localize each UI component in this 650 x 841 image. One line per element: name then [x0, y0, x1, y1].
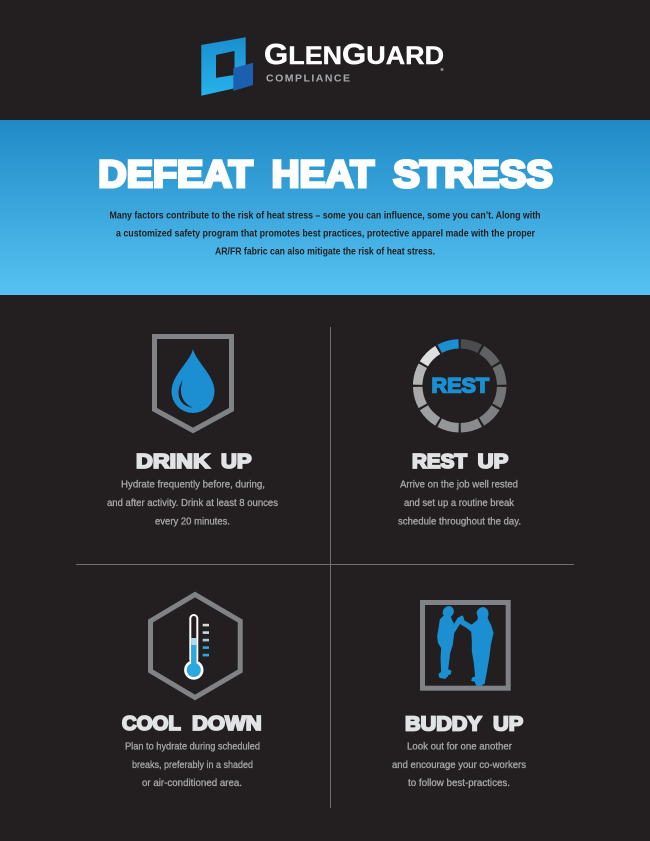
- heading: COOL: [122, 713, 181, 735]
- heading: BUDDY: [405, 713, 482, 735]
- heading: DRINK: [136, 451, 210, 473]
- body text: to follow best-practices.: [408, 778, 510, 789]
- panel: blue intro band: [0, 120, 650, 295]
- heading: UP: [493, 713, 523, 735]
- body text: breaks, preferably in a shaded: [132, 760, 253, 771]
- logo mark: [201, 37, 253, 96]
- heading: REST: [412, 451, 468, 473]
- body text: [398, 479, 521, 527]
- panel: rest up: [398, 344, 521, 527]
- title: STRESS: [393, 154, 553, 196]
- body text: Look out for one another: [407, 741, 513, 752]
- heading: [136, 451, 252, 473]
- body text: or air-conditioned area.: [142, 778, 242, 789]
- body text: every 20 minutes.: [155, 516, 230, 527]
- body text: [125, 741, 260, 789]
- heading: [405, 713, 523, 735]
- heading: UP: [478, 451, 508, 473]
- title: DEFEAT: [98, 154, 253, 196]
- body text: [392, 741, 526, 789]
- registered mark: [440, 68, 444, 71]
- panel: cool down: [122, 594, 262, 789]
- body text: Arrive on the job well rested: [400, 479, 518, 490]
- icon: rest progress ring: [418, 344, 502, 428]
- icon label: REST: REST: [432, 374, 489, 397]
- logo subtitle: COMPLIANCE: [266, 72, 350, 84]
- body text: and set up a routine break: [404, 498, 515, 509]
- body text: Hydrate frequently before, during,: [121, 479, 265, 490]
- body text: and after activity. Drink at least 8 ounces: [107, 498, 278, 509]
- icon: water drop shield: [154, 336, 232, 430]
- icon: thermometer hexagon: [150, 594, 240, 698]
- heading: UP: [221, 451, 252, 473]
- intro text: Many factors contribute to the risk of heat stress – some you can influence, some you can’t. Along with: [110, 210, 540, 221]
- panel: buddy up: [392, 602, 526, 789]
- intro text: a customized safety program that promotes best practices, protective apparel made with the proper: [116, 229, 535, 240]
- body text: and encourage your co-workers: [392, 760, 526, 771]
- body text: Plan to hydrate during scheduled: [125, 741, 260, 752]
- intro text: AR/FR fabric can also mitigate the risk of heat stress.: [215, 246, 435, 257]
- heading: DOWN: [192, 713, 262, 735]
- intro text: [110, 210, 540, 257]
- heading: [122, 713, 262, 735]
- logo wordmark: GLENGUARD: [264, 39, 444, 71]
- heading: [412, 451, 508, 473]
- body text: [107, 479, 278, 527]
- logo: GlenGuard Compliance: [201, 37, 444, 96]
- icon: two co-workers in frame: [422, 602, 508, 688]
- title: HEAT: [272, 154, 374, 196]
- panel: drink up: [107, 336, 278, 527]
- title: [98, 154, 553, 196]
- body text: schedule throughout the day.: [398, 516, 521, 527]
